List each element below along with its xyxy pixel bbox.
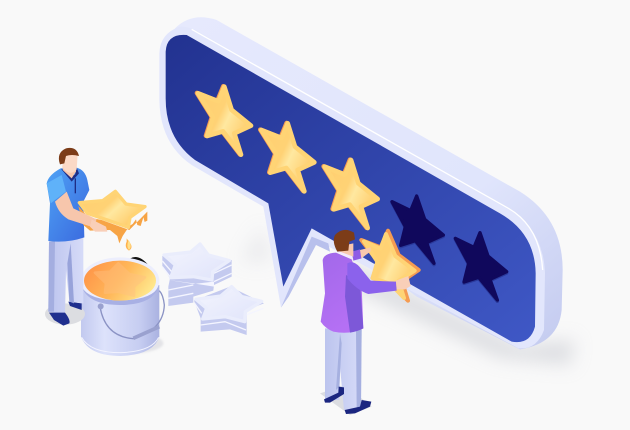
ground shadow of bubble xyxy=(240,225,575,365)
neck xyxy=(338,243,353,257)
bucket handle xyxy=(98,291,164,339)
star pile top face xyxy=(164,244,229,280)
empty star 4 xyxy=(392,196,443,265)
bucket body xyxy=(81,285,159,356)
shoes xyxy=(324,387,344,403)
legs xyxy=(325,328,362,410)
star 2 xyxy=(260,123,314,191)
paint surface xyxy=(84,261,156,301)
hair xyxy=(59,148,79,164)
collar xyxy=(61,168,79,182)
star side with drips xyxy=(78,206,147,243)
near hand xyxy=(396,276,411,289)
star pile: short stack xyxy=(194,287,264,335)
far shoe xyxy=(68,302,82,310)
bucket shadow xyxy=(97,333,163,353)
star top face xyxy=(79,191,145,227)
star pile: tall stack xyxy=(162,244,232,306)
collar xyxy=(336,251,353,259)
shirt xyxy=(47,168,89,242)
rating stars xyxy=(197,86,507,301)
ground shadow xyxy=(320,385,372,415)
speech bubble xyxy=(159,17,563,349)
person with purple jacket placing star xyxy=(320,230,419,415)
short stack top face xyxy=(196,287,262,322)
dripping star xyxy=(78,191,147,251)
hand xyxy=(90,219,107,232)
far arm and hand xyxy=(352,249,362,261)
ground shadow xyxy=(45,303,85,325)
star 3 xyxy=(324,160,378,228)
front arm xyxy=(55,192,97,227)
star in paint xyxy=(95,263,145,296)
bubble blue face xyxy=(166,35,536,342)
pants xyxy=(48,237,83,314)
empty star 5 xyxy=(455,233,507,301)
held star xyxy=(361,231,419,301)
star 1 xyxy=(197,86,251,155)
bucket lid arc xyxy=(130,257,148,265)
jacket xyxy=(321,253,363,333)
tail inner depth xyxy=(281,237,330,308)
paint bucket xyxy=(81,257,164,356)
person with blue shirt holding dripping star xyxy=(45,148,147,326)
hair xyxy=(334,230,355,252)
bubble front rim xyxy=(159,27,545,348)
near shoe xyxy=(49,313,70,326)
bucket rim xyxy=(81,257,159,304)
neck and face xyxy=(62,160,77,178)
near sleeve xyxy=(347,262,397,294)
bubble depth side xyxy=(175,17,563,349)
bubble white highlight line xyxy=(192,29,543,270)
